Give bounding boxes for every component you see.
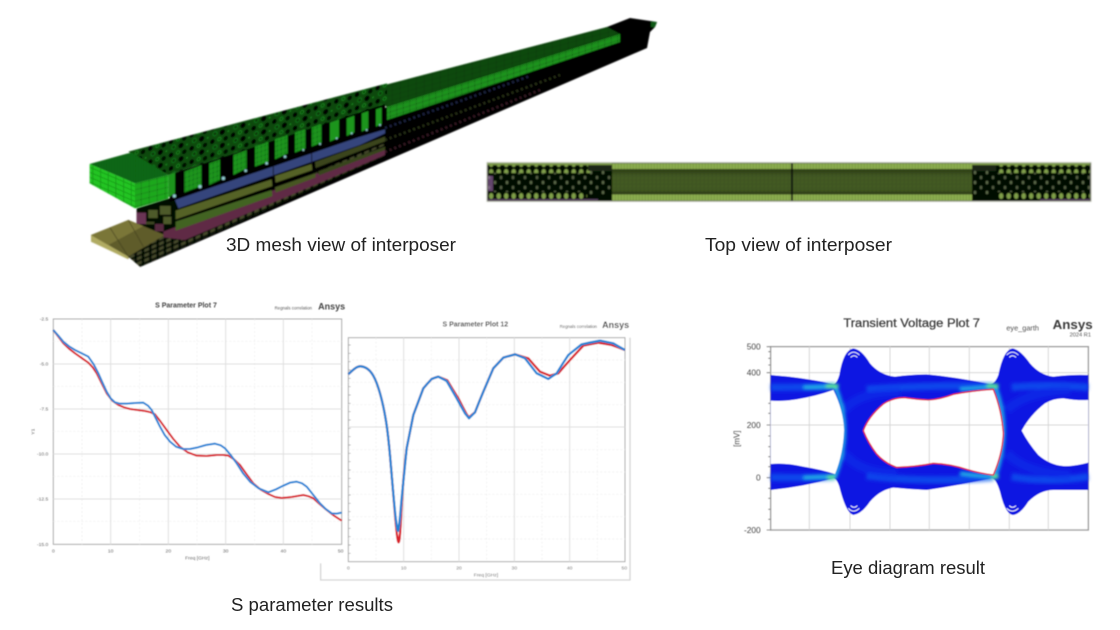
- left stack cells: [145, 206, 171, 224]
- blue curve: [53, 330, 342, 514]
- green pillars: [184, 107, 382, 193]
- chart title: S Parameter Plot 12: [443, 321, 508, 328]
- x axis labels: Y1: [31, 428, 37, 435]
- x axis labels: [31, 428, 344, 562]
- y axis ticks: [767, 347, 771, 530]
- x axis labels: 10: [401, 565, 407, 571]
- green slab left face: [90, 164, 135, 208]
- chart: S Parameter Plot 12: Regnals correlation: [560, 324, 598, 329]
- centre core: [612, 163, 972, 201]
- yellow base plate: [91, 220, 165, 258]
- left via array: [487, 171, 612, 194]
- y axis labels: 200: [747, 420, 761, 430]
- blue eye traces: [771, 348, 1088, 515]
- x axis labels: 0: [347, 565, 350, 571]
- chart: eye diagram, Transient Voltage Plot 7: [732, 317, 1093, 535]
- y axis labels: [744, 342, 761, 535]
- x axis labels: 30: [512, 565, 517, 571]
- far end of interposer: [135, 18, 657, 267]
- x axis labels: Freq [GHz]: [474, 572, 499, 578]
- bright green edge column: [168, 173, 175, 197]
- red curve: [348, 343, 625, 542]
- end cap: [651, 22, 657, 27]
- black mesh body: [135, 18, 657, 267]
- red curve: [53, 330, 342, 521]
- caption: 3D mesh view: 3D mesh view of interposer: [226, 234, 456, 255]
- x axis labels: 20: [166, 548, 171, 554]
- axis ticks: [348, 345, 351, 553]
- pink layer: [163, 148, 385, 240]
- plot frame and grid: [348, 338, 625, 562]
- x axis labels: 20: [456, 565, 462, 571]
- mottled via field: [128, 83, 387, 175]
- white eye openings: [771, 389, 1088, 475]
- y axis labels: -2.5: [40, 317, 49, 323]
- x axis labels: [347, 565, 627, 578]
- chart: S Parameter Plot 12: Ansys: [602, 320, 629, 330]
- chart: eye diagram, Transient Voltage Plot 7: Ansys: [1053, 317, 1093, 332]
- caption: S parameter results: S parameter results: [231, 594, 393, 615]
- x axis labels: 40: [281, 548, 286, 554]
- y axis labels: -5.0: [40, 362, 49, 368]
- black band behind pillars: [168, 103, 385, 202]
- plot frame and grid: [771, 347, 1088, 530]
- chart: S Parameter Plot 7: [31, 301, 345, 562]
- chart: eye diagram, Transient Voltage Plot 7: eye_garth: [1006, 324, 1039, 333]
- lower mesh cells: [128, 143, 385, 267]
- x axis labels: 40: [567, 565, 573, 571]
- chart: eye diagram, Transient Voltage Plot 7: [mV]: [732, 430, 741, 447]
- x axis labels: 50: [338, 548, 344, 554]
- lighter trace bands: [771, 386, 1088, 480]
- blue curve: [348, 341, 625, 531]
- red eye contour: [863, 389, 1003, 475]
- x axis labels: 10: [108, 548, 114, 554]
- y axis labels: -7.5: [40, 407, 49, 413]
- x axis labels: 0: [52, 548, 55, 554]
- 3D mesh view of interposer: [90, 18, 657, 267]
- faint buried layers: [385, 75, 560, 152]
- y axis labels: 500: [747, 342, 761, 352]
- y axis labels: [37, 317, 49, 548]
- olive layer one: [176, 179, 272, 219]
- chart: S Parameter Plot 12: [321, 315, 630, 580]
- grid inside eye openings: [770, 392, 1088, 470]
- y axis labels: -12.5: [37, 497, 49, 503]
- pink stack cells: [137, 213, 146, 224]
- caption: top view: Top view of interposer: [705, 234, 892, 255]
- near end of interposer: [90, 83, 387, 267]
- green front band: [387, 34, 620, 120]
- right via array: [972, 171, 1090, 194]
- green slab right face: [135, 175, 168, 208]
- x axis labels: 30: [223, 548, 229, 554]
- y axis labels: -10.0: [37, 452, 49, 458]
- cyan via dots: [173, 124, 381, 198]
- chart: eye diagram, Transient Voltage Plot 7: 2024 R1: [1070, 333, 1091, 339]
- chart: S Parameter Plot 7: Ansys: [318, 301, 345, 311]
- y axis labels: 400: [747, 368, 761, 378]
- x axis labels: 50: [622, 565, 627, 571]
- y axis labels: -15.0: [37, 542, 49, 548]
- top view of interposer: [487, 162, 1091, 202]
- green top face: [354, 27, 620, 107]
- white panel: [321, 315, 630, 580]
- caption: eye diagram: Eye diagram result: [831, 557, 985, 578]
- y axis labels: -200: [744, 525, 761, 535]
- blue layer: [175, 129, 385, 208]
- overshoot outlines: [848, 352, 1018, 511]
- chart 1 base line: [30, 562, 322, 564]
- plot frame and grid: [53, 319, 342, 544]
- green slab top face: [90, 152, 168, 183]
- chart: S Parameter Plot 7: Regnals correlation: [275, 305, 313, 310]
- left stack backing: [128, 197, 185, 267]
- x axis labels: Freq [GHz]: [185, 556, 210, 562]
- y axis labels: 0: [756, 473, 761, 483]
- chart title: S Parameter Plot 7: [155, 302, 217, 309]
- chart title: Transient Voltage Plot 7: [843, 317, 980, 330]
- olive layer two: [176, 190, 272, 231]
